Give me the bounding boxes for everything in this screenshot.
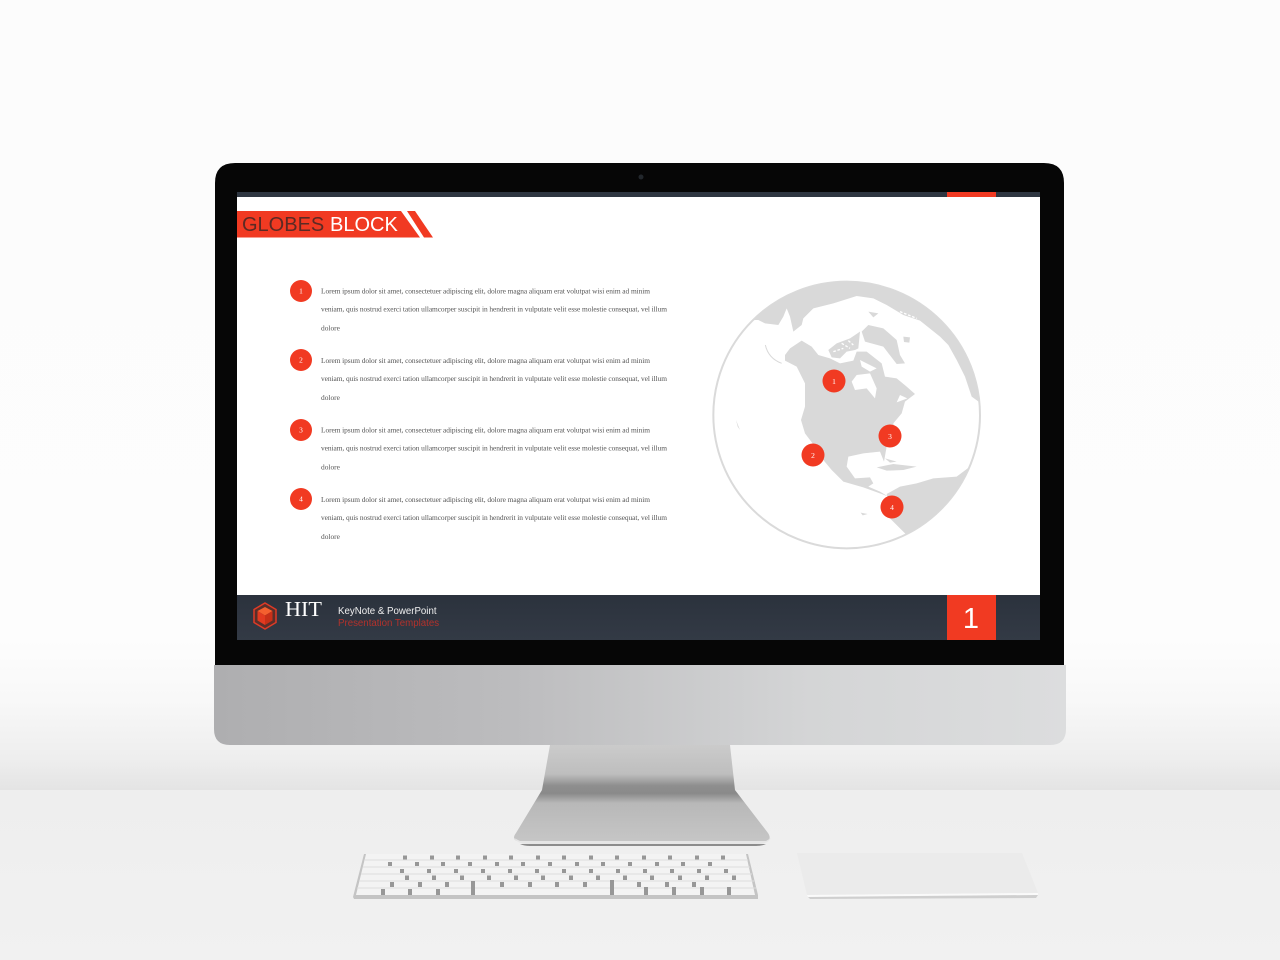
small Arctic island [868,312,878,317]
keyboard [353,854,758,899]
title banner: GLOBES [242,214,324,236]
Aleutian arc [765,345,782,363]
page number box: 1 [963,603,979,635]
icon: hexagon cube logo [254,603,276,629]
monitor chin [214,665,1066,745]
item 2: dolore [321,393,341,402]
item 4: Lorem ipsum dolor sit amet, consectetuer adipiscing elit, dolore magna aliquam erat volutpat wisi enim ad minim [321,495,650,504]
footer subtitle: Presentation Templates [338,618,439,629]
page number box [947,595,996,640]
footer bar [237,595,1040,640]
item 3: 3 [299,426,303,434]
Hudson Bay and inlets [852,360,907,402]
item 1: dolore [321,324,341,332]
South America [886,468,968,534]
marker 3 [878,424,902,448]
title banner: BLOCK [330,214,398,236]
item 2: Lorem ipsum dolor sit amet, consectetuer adipiscing elit, dolore magna aliquam erat volutpat wisi enim ad minim [321,356,650,365]
list of four text items [290,280,667,541]
item 3: dolore [321,462,341,472]
item 3: veniam, quis nostrud exerci tation ullamcorper suscipit in hendrerit in vulputate velit esse molestie consequat, vel illum [321,444,667,452]
North America [785,341,915,497]
marker 1 [822,370,846,392]
globe outline [713,282,980,548]
footer tagline: KeyNote & PowerPoint [338,606,437,617]
Iceland [903,337,910,343]
item 3 [290,419,667,472]
brand name: HIT [285,597,322,621]
Caribbean islands [877,458,917,471]
item 1: 1 [299,286,303,296]
Arctic archipelago [828,332,860,358]
screen [237,192,1040,640]
item 4: 4 [299,494,303,504]
monitor [214,163,1066,745]
item 1 [290,280,667,332]
item 4: veniam, quis nostrud exerci tation ullamcorper suscipit in hendrerit in vulputate velit esse molestie consequat, vel illum [321,513,667,522]
item 3: Lorem ipsum dolor sit amet, consectetuer adipiscing elit, dolore magna aliquam erat volutpat wisi enim ad minim [321,426,650,434]
marker 4 [880,496,904,518]
marker 2 [802,444,824,466]
monitor stand [514,745,771,846]
globe map [712,280,981,550]
Arctic channels [833,312,943,352]
item 1: veniam, quis nostrud exerci tation ullamcorper suscipit in hendrerit in vulputate velit esse molestie consequat, vel illum [321,304,667,314]
marker 1: 1 [832,377,836,386]
item 1: Lorem ipsum dolor sit amet, consectetuer adipiscing elit, dolore magna aliquam erat volutpat wisi enim ad minim [321,286,650,296]
small Pacific islands [736,420,868,515]
item 2: veniam, quis nostrud exerci tation ullamcorper suscipit in hendrerit in vulputate velit esse molestie consequat, vel illum [321,374,667,383]
item 2 [290,349,667,402]
item 4: dolore [321,532,341,541]
title banner [237,211,433,238]
land masses clipped to the globe [736,282,978,534]
item 4 [290,488,667,541]
item 2: 2 [299,356,303,364]
marker 2: 2 [811,451,815,460]
top bar [237,192,1040,197]
marker 3: 3 [888,432,892,441]
trackpad [797,853,1038,899]
webcam [638,174,644,180]
monitor bezel [215,163,1064,665]
Greenland [862,325,905,364]
northern land rim [754,282,978,402]
marker 4: 4 [890,503,894,512]
